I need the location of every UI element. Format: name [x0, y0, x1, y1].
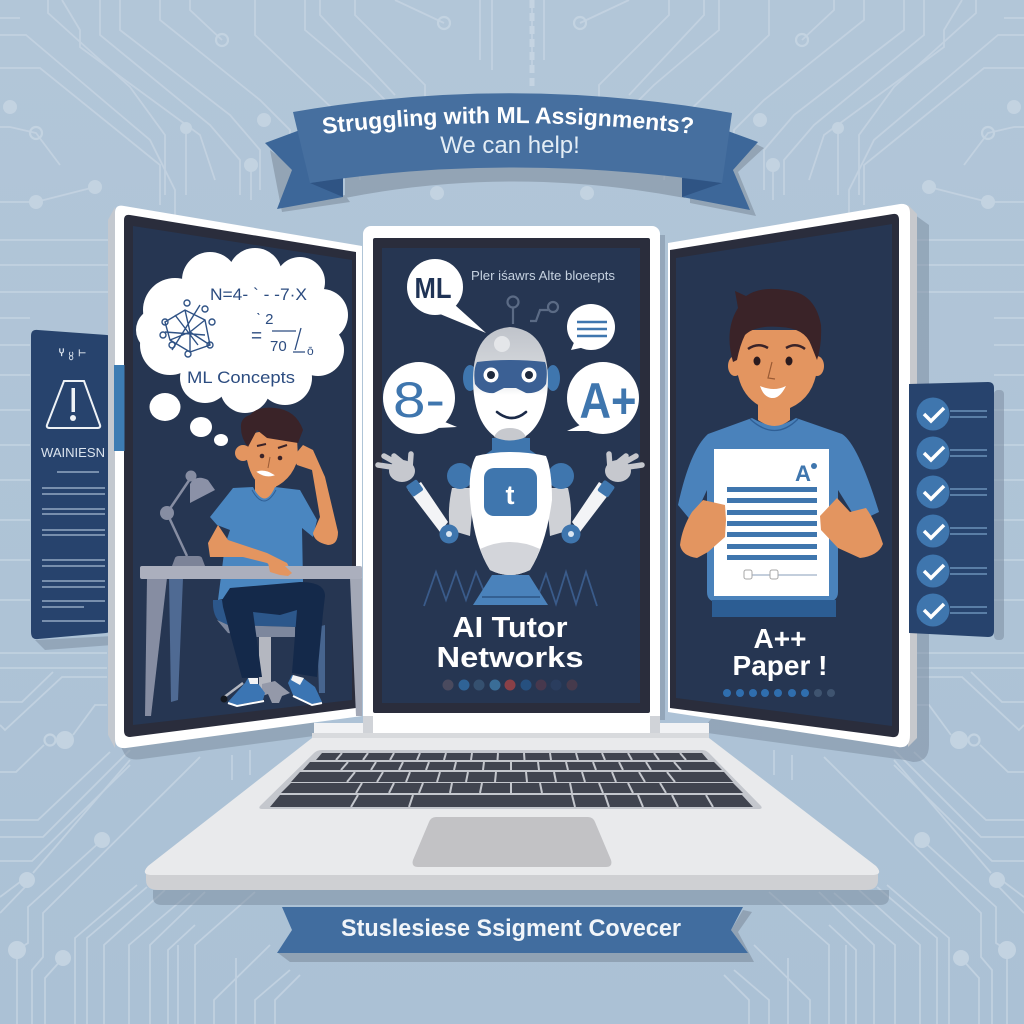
propping arm: [293, 445, 338, 545]
ribbon arc guide: [323, 123, 693, 134]
handwritten equation: N=4- ` - -7·X: [210, 285, 307, 304]
right title: Paper !: [733, 650, 827, 681]
ribbon left tail: [265, 130, 343, 209]
chair seat: [213, 600, 297, 627]
center tablet: AI tutor: [363, 226, 660, 733]
frame: [115, 206, 362, 748]
pants: [222, 582, 325, 678]
chair support: [217, 620, 295, 637]
center title: AI Tutor: [452, 612, 568, 644]
screen: [124, 215, 356, 737]
chair back post: [317, 625, 325, 693]
check items: [916, 398, 987, 626]
left tablet: student struggling: [108, 206, 362, 748]
bottom ribbon banner: [277, 907, 754, 962]
icon: warning triangle: [47, 381, 100, 428]
right checklist sidebar: [909, 382, 994, 637]
desk legs: [145, 578, 362, 716]
laptop deck: [145, 738, 879, 875]
face: [247, 431, 298, 490]
robot left arm: [378, 454, 474, 544]
left warning sidebar: [31, 330, 114, 639]
laptop: [145, 716, 879, 890]
bottom ribbon text: Stuslesiese Ssigment Covecer: [341, 915, 681, 942]
right hand and arm: [820, 498, 883, 558]
key gaps: [336, 753, 713, 807]
sidebar text lines: [42, 472, 105, 621]
screen inner: [133, 226, 352, 725]
checklist card: [909, 382, 994, 637]
robot: [378, 327, 642, 605]
ribbon subtitle: We can help!: [440, 132, 580, 159]
robot eyes: [484, 368, 536, 382]
brows: [257, 444, 287, 448]
shirt: [210, 487, 317, 600]
nose: [268, 457, 270, 468]
ribbon body: [293, 93, 732, 183]
right title: [733, 623, 827, 681]
mirrored circuit pattern: [532, 0, 1024, 1024]
robot base: [473, 575, 548, 605]
panel shadows: [35, 215, 1004, 905]
ML speech bubble: ML: [414, 273, 452, 305]
right title: A++: [754, 623, 806, 654]
keyboard: [259, 750, 762, 809]
ML speech bubble: [407, 259, 486, 333]
face: [737, 330, 817, 412]
bottom ribbon shape: [277, 907, 748, 953]
hair: [241, 408, 303, 447]
robot neck: [480, 438, 542, 458]
handwritten fraction: 70: [270, 338, 287, 355]
sidebar heading: WAINIESN: [41, 445, 105, 460]
cloud label: ML Concepts: [187, 368, 295, 387]
bottom ribbon shadow: [278, 910, 754, 962]
robot right arm: [546, 454, 642, 544]
ribbon folds: [310, 178, 722, 197]
frame side: [908, 205, 917, 747]
thought cloud: [136, 248, 348, 446]
robot chest screen: [484, 468, 537, 516]
ribbon right tail: [682, 130, 758, 210]
center pagination dots: [442, 680, 578, 690]
shirt: [678, 418, 879, 602]
student chair: [213, 600, 325, 703]
leaning arm: [208, 525, 292, 575]
handwritten fraction: ō: [307, 344, 314, 358]
robot shoulders: [447, 463, 473, 489]
ears: [728, 356, 742, 376]
smile: [760, 386, 786, 398]
hair: [729, 289, 821, 362]
frame side: [108, 207, 115, 748]
frame: [363, 226, 660, 733]
chair feet: [262, 681, 290, 703]
right tablet: A++ paper: [668, 204, 917, 747]
chair post: [259, 637, 271, 690]
center title: [436, 612, 584, 674]
student shoes: [228, 675, 322, 706]
keyboard tray: [259, 750, 762, 809]
hinges: [312, 716, 709, 739]
center trace: [530, 0, 534, 90]
paper: [714, 449, 829, 596]
neck: [255, 480, 276, 499]
desk top: [140, 566, 362, 579]
shirt hem: [712, 600, 836, 617]
brows: [748, 345, 805, 349]
center title: Networks: [436, 642, 584, 674]
handwritten fraction: =: [251, 326, 262, 347]
paper lines: [727, 487, 817, 560]
ribbon shadow: [270, 135, 764, 216]
signature: [745, 574, 817, 576]
ear: [235, 445, 251, 461]
sidebar connector: [114, 365, 124, 451]
collar: [750, 419, 798, 430]
student hand on desk: [267, 558, 292, 576]
desk lamp: [160, 470, 215, 566]
robot torso: [470, 452, 552, 575]
student head: [235, 408, 303, 490]
robot head: [473, 327, 548, 440]
smile: [258, 471, 273, 476]
nose: [768, 362, 775, 379]
right pagination dots: [723, 689, 835, 697]
robot ears: [463, 365, 477, 391]
screen inner: [676, 224, 892, 726]
laptop base edge: [146, 868, 878, 890]
happy student: [678, 289, 883, 617]
doodle: neural network: [160, 300, 215, 357]
small caption: Pler iśawrs Alte bloeepts: [471, 269, 615, 283]
menu speech bubble: [567, 304, 615, 350]
circuit antenna glyphs: [508, 296, 558, 324]
B-minus speech bubble: 8-: [393, 372, 445, 428]
B-minus speech bubble: [383, 362, 457, 434]
robot smile: [497, 412, 526, 418]
screen: [670, 214, 899, 737]
handwritten fraction: [251, 311, 314, 358]
sidebar card: [31, 330, 114, 639]
chest glyph: t: [506, 480, 514, 510]
top ribbon banner: [265, 93, 764, 216]
screen inner: [382, 248, 640, 703]
frame: [668, 204, 910, 747]
eyes: [754, 356, 760, 366]
signal waves: [424, 572, 597, 606]
A-plus speech bubble: [567, 362, 639, 434]
screen: [373, 238, 650, 713]
A-plus speech bubble: A+: [580, 373, 636, 429]
trackpad: [413, 817, 611, 867]
key rows: [270, 753, 753, 807]
sidebar small label: Ⴤ ႘ ⊢: [59, 348, 87, 361]
neck: [758, 400, 790, 426]
handwritten fraction: ˋ 2: [256, 311, 274, 328]
grade mark: A: [795, 461, 811, 486]
circuit pattern: [0, 0, 492, 1024]
student torso: [208, 445, 338, 678]
ribbon headline: Struggling with ML Assignments?: [323, 106, 693, 134]
collar: [252, 490, 276, 501]
left hand and arm: [680, 500, 726, 558]
robot mask: [474, 360, 547, 393]
eyes: [260, 454, 264, 458]
